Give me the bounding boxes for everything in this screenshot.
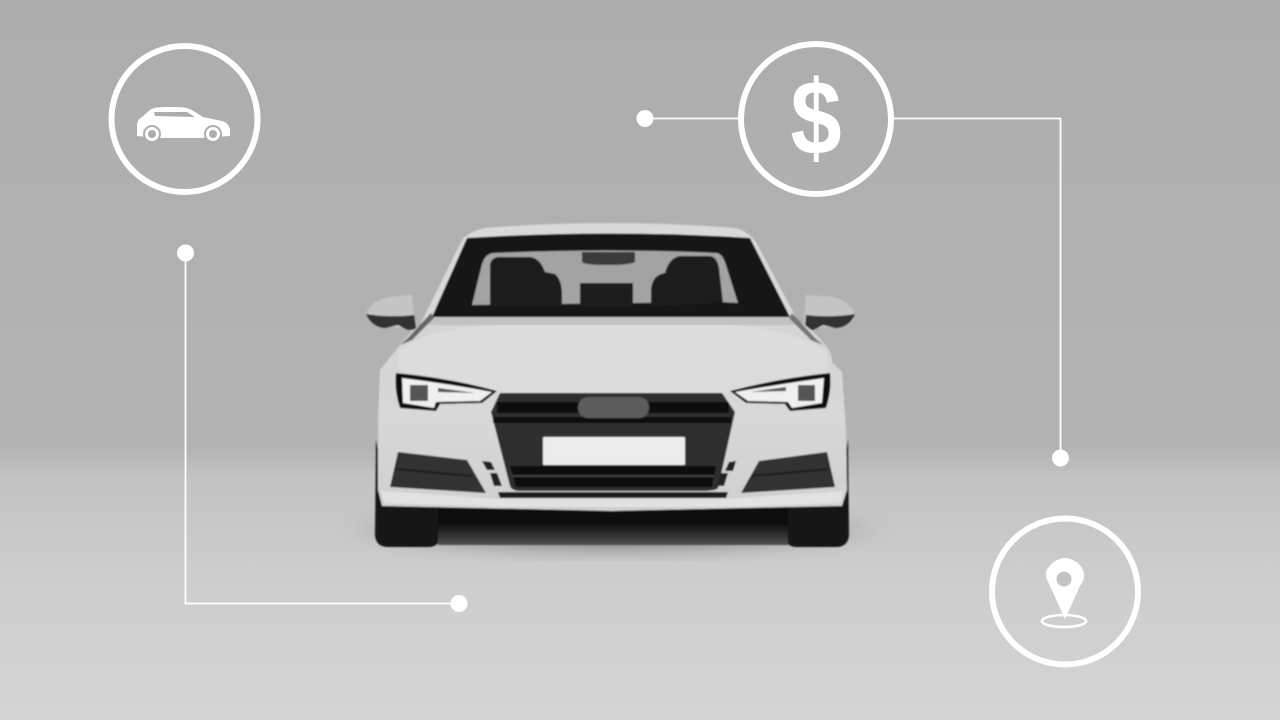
badge bbox=[578, 397, 649, 418]
roof bbox=[420, 223, 800, 325]
ground shadow bbox=[340, 504, 890, 556]
wheels bbox=[375, 440, 849, 547]
rearview mirror bbox=[582, 252, 635, 265]
icon: dollar in circle: $ bbox=[790, 59, 842, 177]
connector: dollar icon left bbox=[636, 110, 740, 127]
right headlight bbox=[730, 373, 830, 411]
icon: location pin in circle bbox=[992, 518, 1138, 664]
right fog vent bbox=[741, 452, 835, 493]
mirrors bbox=[366, 295, 855, 330]
left A-pillar crease bbox=[400, 313, 434, 345]
seats bbox=[490, 256, 723, 307]
rear glass bbox=[472, 250, 738, 305]
grille bbox=[491, 393, 735, 491]
connector: dollar icon to pin icon bbox=[892, 118, 1069, 466]
fog slits bbox=[482, 461, 736, 486]
connector: car icon to front of car bbox=[177, 244, 468, 612]
body and hood bbox=[378, 317, 847, 511]
hood highlight bbox=[398, 325, 828, 392]
icon: car in circle bbox=[112, 46, 258, 192]
licence plate bbox=[543, 437, 685, 465]
icon: dollar in circle bbox=[741, 44, 891, 194]
right A-pillar crease bbox=[789, 313, 823, 345]
car bbox=[366, 223, 855, 547]
windshield bbox=[432, 234, 790, 317]
underbody shadow bbox=[438, 500, 788, 545]
left fog vent bbox=[390, 452, 486, 493]
left headlight bbox=[396, 373, 497, 411]
lower splitter bbox=[498, 492, 728, 498]
